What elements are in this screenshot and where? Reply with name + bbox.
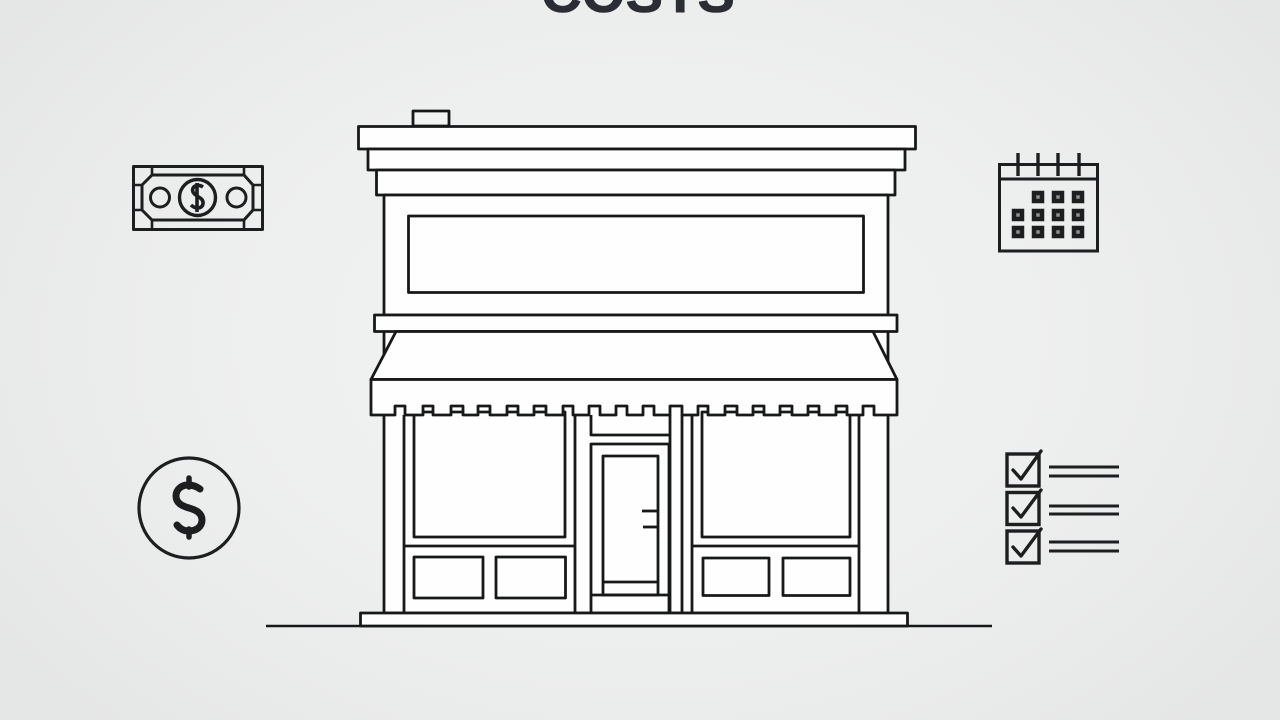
storefront building [266, 111, 992, 626]
centre column [670, 415, 692, 613]
sign band [374, 315, 897, 332]
left shopfront [404, 412, 575, 613]
icon: dollar coin [139, 458, 239, 558]
striped awning [371, 332, 897, 415]
icon: calendar [1000, 153, 1098, 251]
blank sign board [408, 216, 864, 292]
chimney vent [413, 111, 449, 126]
icon: banknote [134, 166, 262, 230]
roof cornice [358, 126, 916, 195]
entrance door [591, 415, 669, 613]
base plinth [360, 613, 908, 626]
upper wall [384, 195, 888, 315]
icon: checklist [1007, 451, 1119, 563]
lower wall [384, 331, 888, 613]
right shopfront [692, 412, 859, 613]
calendar day grid [1014, 193, 1082, 236]
ground line [266, 625, 992, 627]
